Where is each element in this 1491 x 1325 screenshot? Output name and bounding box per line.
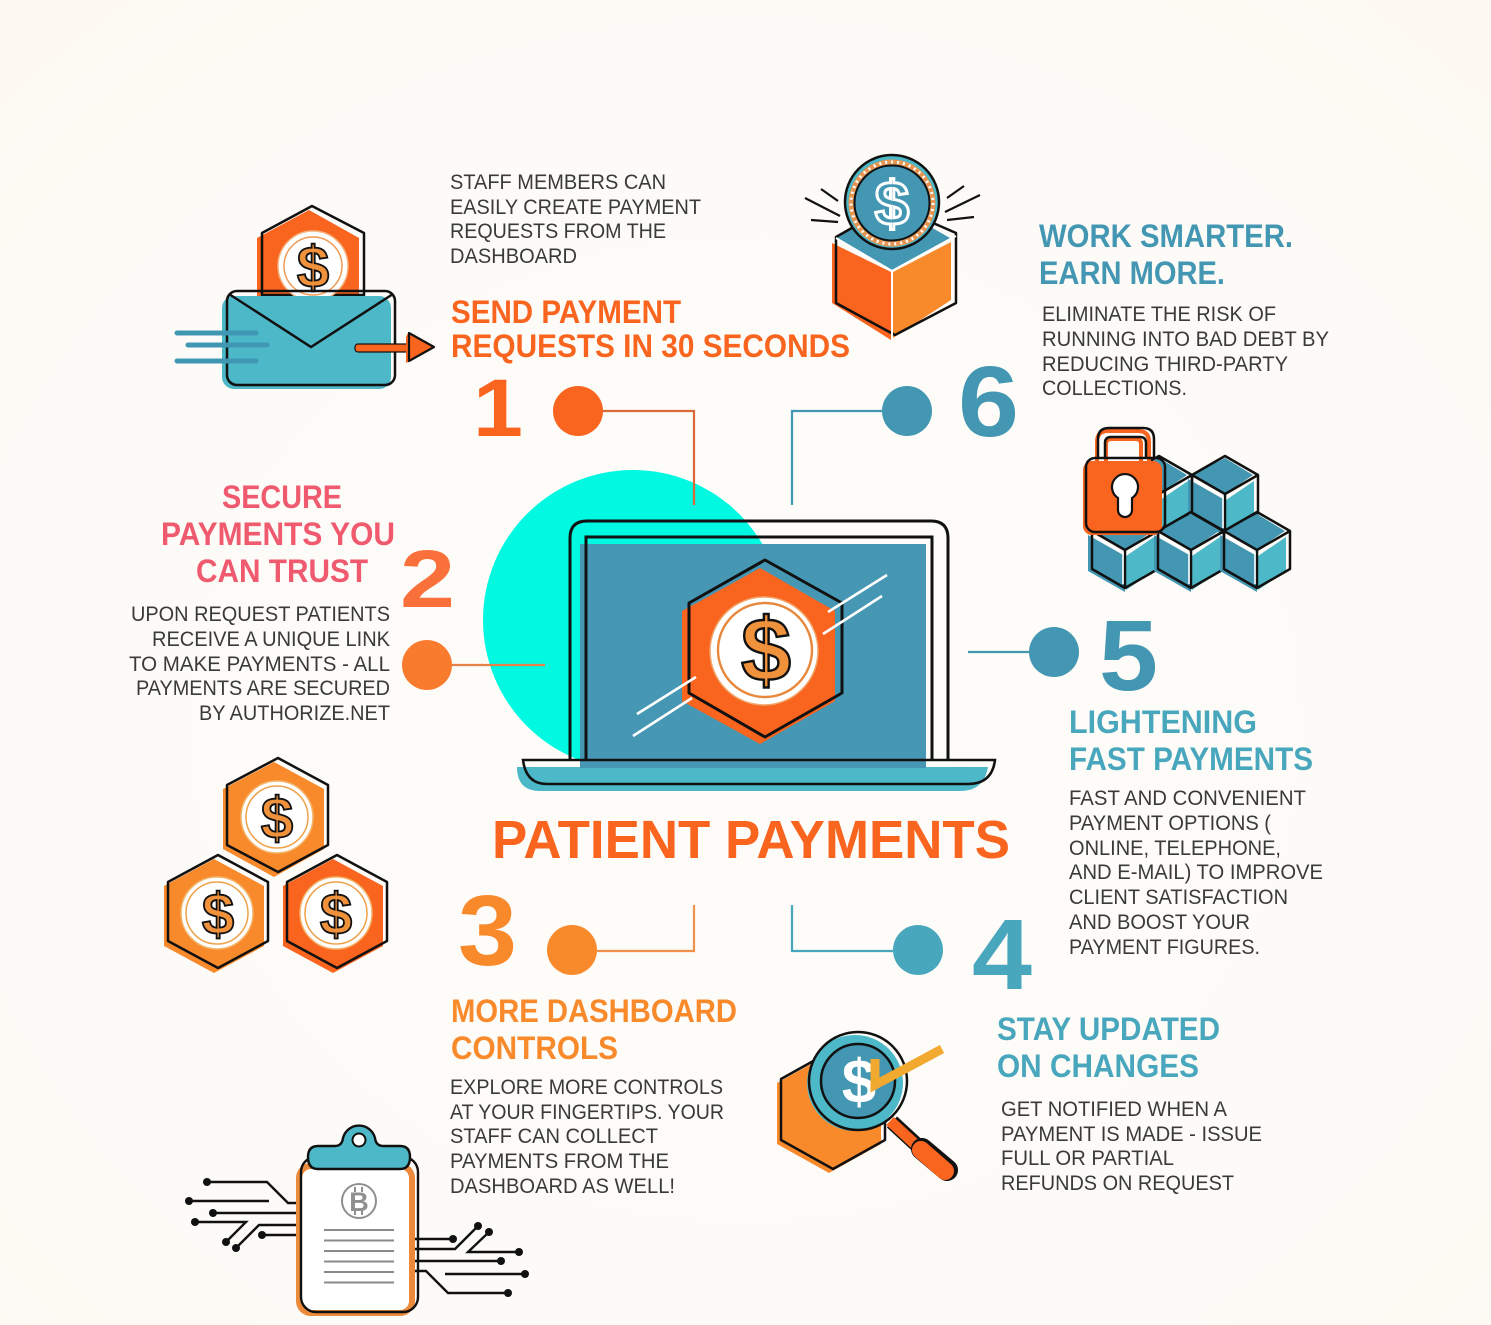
text: step 2 description: PAYMENTS ARE SECURED [136,677,390,700]
icon: magnifying glass over hexagon: $ [842,1048,876,1117]
text: step 3 description [450,1076,724,1198]
heading: secure payments: CAN TRUST [196,553,368,589]
heading: lightening fast payments [1069,704,1313,777]
text: step 3 description: EXPLORE MORE CONTROLS [450,1076,723,1099]
text: step 6 description: COLLECTIONS. [1042,377,1187,400]
text: step 6 description: ELIMINATE THE RISK OF [1042,303,1276,326]
number 2 with connector [400,534,545,690]
heading: more dashboard controls: MORE DASHBOARD [451,993,737,1029]
icon: bitcoin clipboard with circuit lines: B [349,1187,369,1217]
heading: stay updated: STAY UPDATED [997,1011,1220,1047]
icon: magnifying glass over hexagon [777,1032,947,1173]
icon: coin on box [805,155,980,340]
text: step 5 description: CLIENT SATISFACTION [1069,886,1288,909]
heading: work smarter: EARN MORE. [1039,255,1225,291]
text: step 2 description: BY AUTHORIZE.NET [199,702,390,725]
text: step 6 description [1042,303,1329,400]
number 3 with connector [458,875,694,987]
text: step 1 description: EASILY CREATE PAYMENT [450,196,701,219]
number 5 with connector [968,600,1158,712]
icon: three dollar hexagons [164,758,387,973]
teal circle behind laptop [483,470,783,770]
icon: three dollar hexagons: $ [320,882,352,947]
text: step 5 description: PAYMENT FIGURES. [1069,936,1260,959]
text: step 5 description: AND E-MAIL) TO IMPROVE [1069,861,1323,884]
text: step 5 description [1069,787,1323,959]
heading: secure payments [161,479,395,589]
text: step 3 description: PAYMENTS FROM THE [450,1150,669,1173]
number 1 with connector [473,363,694,505]
number 6 with connector: 6 [958,346,1019,458]
number 3 with connector: 3 [458,875,517,987]
text: step 1 description: REQUESTS FROM THE [450,220,666,243]
text: step 2 description: UPON REQUEST PATIENTS [131,603,390,626]
icon: three dollar hexagons: $ [202,882,234,947]
text: step 6 description: RUNNING INTO BAD DEBT BY [1042,328,1329,351]
heading: work smarter [1039,218,1293,291]
heading: lightening fast payments: LIGHTENING [1069,704,1257,740]
text: step 1 description: STAFF MEMBERS CAN [450,171,666,194]
heading: more dashboard controls: CONTROLS [451,1030,618,1066]
text: step 2 description: RECEIVE A UNIQUE LINK [152,628,390,651]
text: step 6 description: REDUCING THIRD-PARTY [1042,353,1288,376]
illustration: laptop with dollar hexagon: $ [741,601,791,701]
text: step 5 description: PAYMENT OPTIONS ( [1069,812,1271,835]
text: step 1 description: DASHBOARD [450,245,577,268]
heading: secure payments: SECURE [222,479,342,515]
text: step 4 description: PAYMENT IS MADE - ISSUE [1001,1123,1262,1146]
number 2 with connector: 2 [400,534,455,625]
heading: send payment requests: SEND PAYMENT [451,294,681,330]
number 4 with connector: 4 [972,899,1032,1011]
number 6 with connector [792,346,1019,505]
text: step 1 description [450,171,701,268]
text: step 3 description: DASHBOARD AS WELL! [450,1175,675,1198]
heading: work smarter: WORK SMARTER. [1039,218,1293,254]
text: step 4 description: FULL OR PARTIAL [1001,1147,1174,1170]
illustration: laptop with dollar hexagon [517,521,995,791]
number 1 with connector: 1 [473,363,523,454]
text: step 4 description [1001,1098,1262,1195]
text: step 3 description: STAFF CAN COLLECT [450,1125,658,1148]
text: step 5 description: AND BOOST YOUR [1069,911,1250,934]
title: PATIENT PAYMENTS [492,810,1010,870]
icon: envelope with dollar hexagon [177,206,434,389]
icon: bitcoin clipboard with circuit lines [185,1126,529,1313]
heading: more dashboard controls [451,993,737,1066]
text: step 2 description: TO MAKE PAYMENTS - ALL [129,653,390,676]
icon: three dollar hexagons: $ [261,786,293,851]
text: step 4 description: GET NOTIFIED WHEN A [1001,1098,1227,1121]
icon: envelope with dollar hexagon: $ [297,235,329,300]
heading: send payment requests [451,294,850,364]
heading: send payment requests: REQUESTS IN 30 SECONDS [451,328,850,364]
heading: secure payments: PAYMENTS YOU [161,516,395,552]
icon: coin on box: $ [875,170,909,239]
heading: stay updated: ON CHANGES [997,1048,1199,1084]
text: step 3 description: AT YOUR FINGERTIPS. YOUR [450,1101,724,1124]
heading: lightening fast payments: FAST PAYMENTS [1069,741,1313,777]
number 5 with connector: 5 [1099,600,1158,712]
text: step 4 description: REFUNDS ON REQUEST [1001,1172,1234,1195]
heading: stay updated [997,1011,1220,1084]
text: step 2 description [129,603,390,725]
number 4 with connector [792,899,1032,1011]
text: step 5 description: ONLINE, TELEPHONE, [1069,837,1281,860]
text: step 5 description: FAST AND CONVENIENT [1069,787,1306,810]
icon: padlock and blocks [1083,428,1290,592]
